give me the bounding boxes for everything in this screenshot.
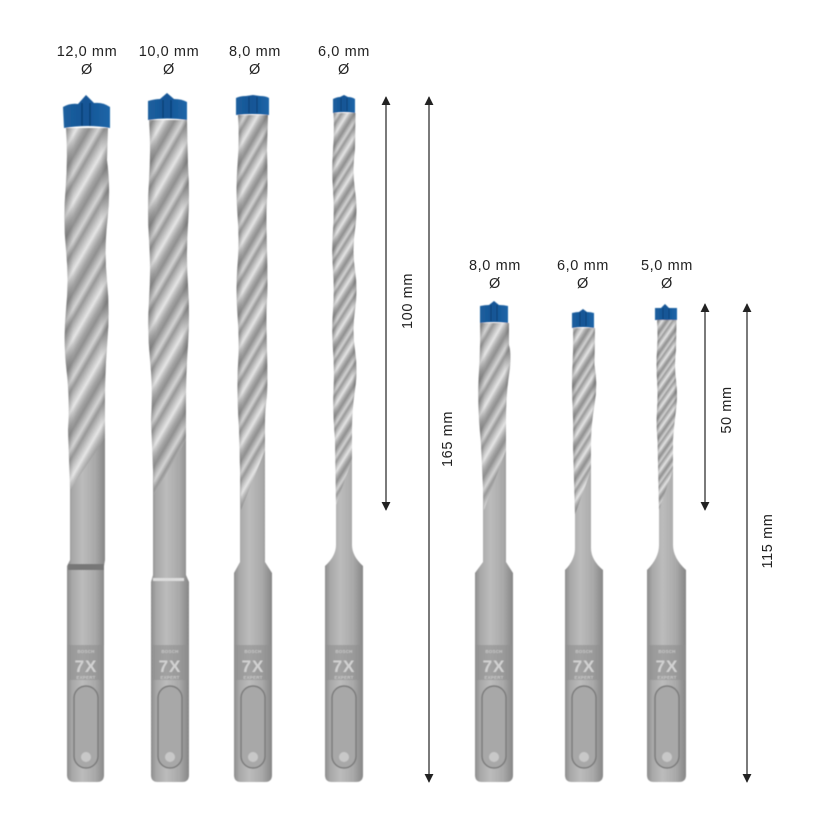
diameter label: 10,0 mm: Ø bbox=[163, 62, 175, 78]
dimension arrow: 50 mm: 50 mm bbox=[719, 386, 735, 434]
drill bit: 5 mm short: 7X bbox=[656, 657, 678, 676]
dimension arrow: 115 mm: 115 mm bbox=[760, 514, 776, 568]
drill bit: 5 mm short: BOSCH bbox=[658, 649, 676, 654]
drill bit: 6 mm short: BOSCH bbox=[575, 649, 593, 654]
diameter label: 6,0 mm short: Ø bbox=[577, 276, 589, 292]
dimension arrow: 165 mm: 165 mm bbox=[440, 411, 456, 467]
drill bit: 10 mm bbox=[148, 93, 189, 782]
drill bit: 8 mm short bbox=[475, 301, 513, 782]
drill bit: 6 mm long: 7X bbox=[333, 657, 355, 676]
drill bit: 8 mm long: 7X bbox=[242, 657, 264, 676]
diameter label: 5,0 mm short: 5,0 mm bbox=[641, 258, 693, 274]
diameter label: 6,0 mm long: Ø bbox=[338, 62, 350, 78]
drill bit: 8 mm short: EXPERT bbox=[484, 675, 504, 680]
diameter label: 8,0 mm short: 8,0 mm bbox=[469, 258, 521, 274]
drill bit: 6 mm short bbox=[565, 309, 603, 782]
drill bit: 12 mm: EXPERT bbox=[76, 675, 96, 680]
dimension arrow: 100 mm: 100 mm bbox=[400, 273, 416, 329]
drill bit: 5 mm short bbox=[647, 304, 686, 782]
drill bit: 8 mm long: EXPERT bbox=[243, 675, 263, 680]
drill bit: 8 mm short: 7X bbox=[483, 657, 505, 676]
drill bit: 8 mm long bbox=[234, 95, 272, 782]
drill bit: 12 mm: 7X bbox=[75, 657, 97, 676]
drill bit: 10 mm: 7X bbox=[159, 657, 181, 676]
drill bit: 8 mm long: BOSCH bbox=[244, 649, 262, 654]
drill bit: 10 mm: BOSCH bbox=[161, 649, 179, 654]
drill bit: 10 mm: EXPERT bbox=[160, 675, 180, 680]
diameter label: 12,0 mm: 12,0 mm bbox=[57, 44, 117, 60]
drill bit: 6 mm short: 7X bbox=[573, 657, 595, 676]
diameter label: 5,0 mm short: Ø bbox=[661, 276, 673, 292]
diameter label: 8,0 mm long: 8,0 mm bbox=[229, 44, 281, 60]
drill bit: 6 mm short: EXPERT bbox=[574, 675, 594, 680]
drill bit: 8 mm short: BOSCH bbox=[485, 649, 503, 654]
diameter label: 12,0 mm: Ø bbox=[81, 62, 93, 78]
drill bit: 12 mm: BOSCH bbox=[77, 649, 95, 654]
diameter label: 6,0 mm long: 6,0 mm bbox=[318, 44, 370, 60]
diameter label: 10,0 mm: 10,0 mm bbox=[139, 44, 199, 60]
drill bit: 12 mm bbox=[63, 95, 110, 782]
drill bit: 6 mm long bbox=[325, 95, 363, 782]
diameter label: 8,0 mm short: Ø bbox=[489, 276, 501, 292]
diameter label: 6,0 mm short: 6,0 mm bbox=[557, 258, 609, 274]
diameter label: 8,0 mm long: Ø bbox=[249, 62, 261, 78]
drill bit: 6 mm long: EXPERT bbox=[334, 675, 354, 680]
drill bit: 6 mm long: BOSCH bbox=[335, 649, 353, 654]
drill bit: 5 mm short: EXPERT bbox=[657, 675, 677, 680]
